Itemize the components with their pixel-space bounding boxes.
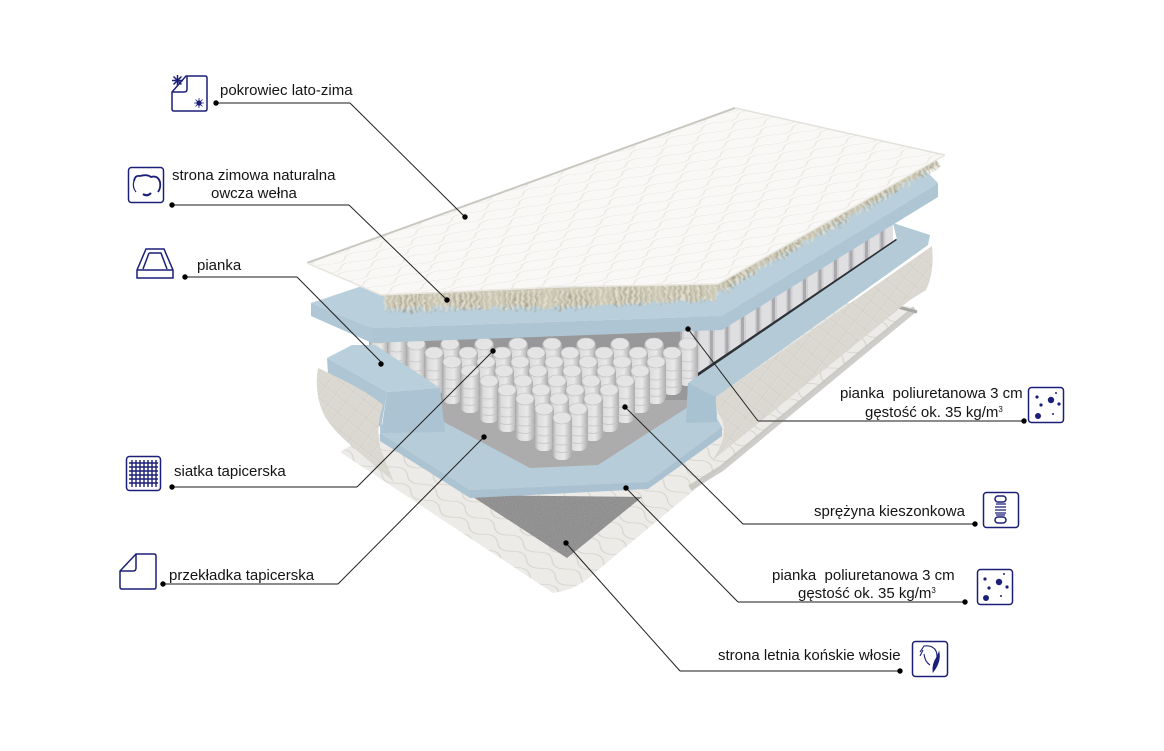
bottom quilted summer side [340, 300, 917, 593]
label: strona zimowa naturalna owcza wełna: owcza wełna [211, 185, 298, 202]
label: pokrowiec lato-zima: pokrowiec lato-zima [220, 82, 353, 99]
icon: spacer sheet [120, 554, 156, 589]
right foam band [686, 223, 930, 423]
left cut fabric [317, 368, 394, 482]
icon: foam dots bottom [978, 570, 1012, 604]
leader: pianka dolna [623, 485, 968, 605]
wool layer [385, 160, 938, 303]
spring block backing [372, 325, 722, 400]
label: pianka poliuretanowa bottom: 3 [931, 586, 936, 595]
label: pianka poliuretanowa top [840, 385, 1023, 421]
icon: foam dots top [1028, 388, 1064, 422]
label: siatka tapicerska: siatka tapicerska [174, 463, 286, 480]
leader: strona zimowa [169, 202, 450, 303]
mattress illustration [307, 108, 945, 593]
left foam block [327, 345, 445, 433]
pocket springs [369, 319, 698, 460]
top quilted cover [307, 108, 945, 295]
icon: horse [912, 642, 948, 676]
label: sprężyna kieszonkowa: sprężyna kieszonkowa [814, 503, 966, 520]
label: strona zimowa naturalna owcza wełna [172, 167, 336, 202]
leader: pianka [182, 274, 384, 367]
leader: strona letnia [563, 540, 903, 674]
leader: sprezyna kieszonkowa [622, 404, 978, 527]
label: strona letnia końskie włosie: strona letnia końskie włosie [718, 647, 901, 664]
icon: cover summer winter [172, 75, 207, 111]
upper foam layer [311, 170, 938, 343]
side wall of pocket springs [680, 215, 897, 380]
label: strona zimowa naturalna owcza wełna: strona zimowa naturalna [172, 167, 336, 184]
label: przekładka tapicerska: przekładka tapicerska [169, 567, 315, 584]
label: pianka poliuretanowa bottom: pianka poliuretanowa 3 cm [772, 567, 955, 584]
icon: foam tray [137, 249, 173, 278]
label: pianka poliuretanowa bottom: gęstość ok. 35 kg/m [798, 585, 931, 602]
label: pianka poliuretanowa top: pianka poliuretanowa 3 cm [840, 385, 1023, 402]
label: pianka poliuretanowa top: 3 [998, 405, 1003, 414]
right cut fabric [713, 246, 933, 460]
lower foam sheet [380, 390, 722, 498]
leader: siatka tapicerska [169, 348, 496, 490]
leader: przekladka tapicerska [160, 434, 487, 587]
icon: sheep wool [128, 168, 164, 202]
horsehair felt layer [470, 495, 642, 558]
leader: pokrowiec lato-zima [213, 100, 468, 220]
label: pianka: pianka [197, 257, 242, 274]
upholstery spacer [432, 372, 688, 468]
icon: upholstery mesh [126, 456, 160, 490]
leader: pianka gorna [685, 326, 1027, 424]
label: pianka poliuretanowa top: gęstość ok. 35 kg/m [865, 404, 998, 421]
label: pianka poliuretanowa bottom [772, 567, 955, 602]
icon: pocket spring [984, 492, 1018, 528]
